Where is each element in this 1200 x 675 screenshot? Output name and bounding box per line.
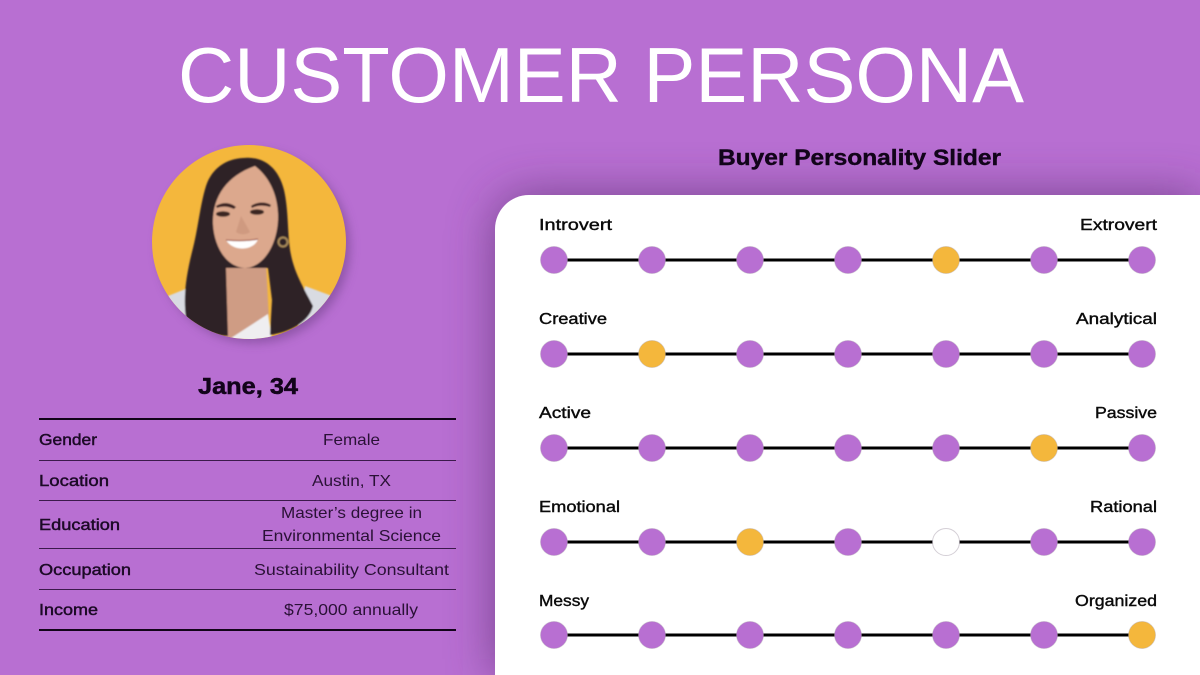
slider: messy to organized: Organized: [1075, 593, 1157, 610]
slider: emotional to rational: Emotional: [539, 499, 620, 516]
row: income: Income: [39, 602, 98, 619]
row: education: Master’s degree in: [281, 505, 422, 522]
row: education: [39, 505, 441, 545]
slider: messy to organized: [539, 593, 1157, 648]
row: occupation: [39, 562, 450, 579]
slider: creative to analytical: Analytical: [1076, 311, 1157, 328]
slider: emotional to rational: Rational: [1090, 499, 1157, 516]
row: education: Environmental Science: [262, 528, 441, 545]
slider: active to passive: Passive: [1095, 405, 1157, 422]
persona name: Jane, 34: [198, 373, 298, 399]
row: gender: [39, 432, 380, 449]
row: education: Education: [39, 517, 120, 534]
row: gender: Gender: [39, 432, 98, 449]
row: location: Austin, TX: [312, 473, 391, 490]
title: CUSTOMER PERSONA: [178, 31, 1024, 119]
slider: active to passive: Active: [539, 405, 591, 422]
slider: creative to analytical: Creative: [539, 311, 607, 328]
slider: introvert to extrovert: Extrovert: [1080, 217, 1158, 234]
slider: active to passive: [539, 405, 1157, 462]
slider heading: Buyer Personality Slider: [718, 145, 1001, 170]
row: occupation: Occupation: [39, 562, 131, 579]
row: gender: Female: [323, 432, 380, 449]
slider: creative to analytical: [539, 311, 1157, 368]
persona details table: [39, 419, 456, 630]
slider: introvert to extrovert: Introvert: [539, 217, 613, 234]
row: location: [39, 473, 391, 490]
panel: personality slider: [495, 195, 1200, 675]
row: income: $75,000 annually: [284, 602, 418, 619]
profile photo: [152, 145, 350, 343]
panel shadow: [495, 195, 1200, 675]
slider: introvert to extrovert: [539, 217, 1158, 274]
slider: messy to organized: Messy: [539, 593, 589, 610]
row: income: [39, 602, 418, 619]
row: occupation: Sustainability Consultant: [254, 562, 450, 579]
row: location: Location: [39, 473, 109, 490]
slider: emotional to rational: [539, 499, 1157, 556]
